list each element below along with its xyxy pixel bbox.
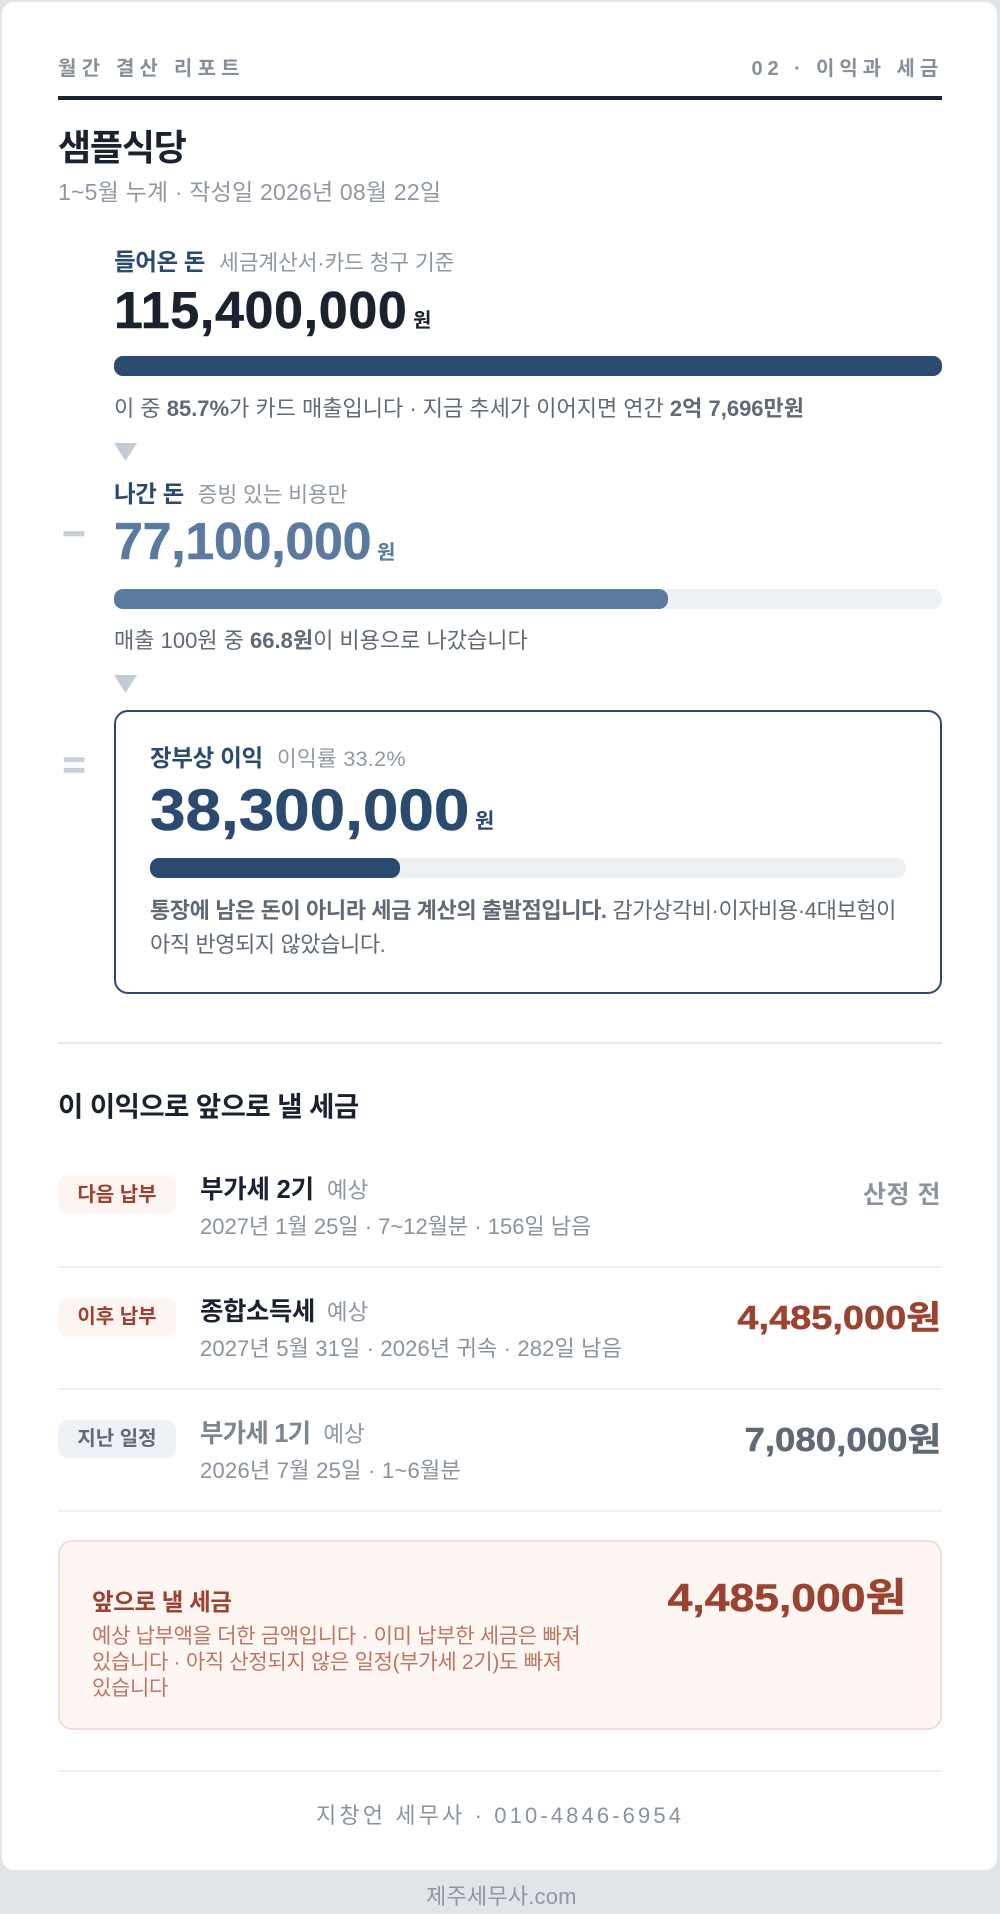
label: book profit: 장부상 이익 이익률 33.2% bbox=[150, 745, 406, 771]
equals sign: = bbox=[62, 743, 86, 787]
unit: money in: 원 bbox=[413, 310, 431, 332]
header rule bbox=[58, 96, 942, 100]
note: book profit: 아직 반영되지 않았습니다. bbox=[150, 932, 385, 957]
site name: 제주세무사.com bbox=[426, 1884, 577, 1909]
bar: money in bbox=[114, 356, 942, 376]
amount: 4,485,000원 bbox=[737, 1299, 941, 1336]
unit: book profit: 원 bbox=[475, 810, 494, 833]
header right label: 02 · 이익과 세금 bbox=[752, 58, 943, 80]
amount status: 산정 전 bbox=[863, 1181, 941, 1209]
badge: later payment bbox=[58, 1298, 176, 1336]
divider bbox=[58, 1510, 942, 1512]
badge: next payment: 다음 납부 bbox=[77, 1184, 157, 1206]
panel: money in bbox=[114, 249, 942, 421]
note: money out: 매출 100원 중 66.8원이 비용으로 나갔습니다 bbox=[114, 628, 528, 653]
row: income tax bbox=[58, 1298, 941, 1361]
note: book profit bbox=[150, 898, 896, 957]
amount: 7,080,000원 bbox=[744, 1421, 941, 1458]
row: VAT 2nd term bbox=[58, 1176, 941, 1239]
label: money in: 들어온 돈 세금계산서·카드 청구 기준 bbox=[114, 249, 454, 275]
divider bbox=[58, 1042, 942, 1044]
unit: money out: 원 bbox=[377, 542, 395, 564]
panel: money out bbox=[114, 481, 942, 653]
bar: money out bbox=[114, 589, 942, 609]
amount: book profit: 38,300,000 bbox=[150, 778, 469, 843]
total description: 예상 납부액을 더한 금액입니다 · 이미 납부한 세금은 빠져 bbox=[92, 1625, 580, 1648]
name: 부가세 1기 예상 bbox=[200, 1420, 365, 1448]
detail: 2026년 7월 25일 · 1~6월분 bbox=[200, 1458, 461, 1483]
minus sign: − bbox=[62, 512, 86, 556]
header left label: 월간 결산 리포트 bbox=[58, 58, 245, 80]
subtitle: 1~5월 누계 · 작성일 2026년 08월 22일 bbox=[58, 179, 441, 205]
total description bbox=[92, 1625, 580, 1700]
name: 부가세 2기 예상 bbox=[200, 1176, 368, 1204]
section heading: 이 이익으로 앞으로 낼 세금 bbox=[58, 1091, 359, 1122]
total label: 앞으로 낼 세금 bbox=[92, 1589, 232, 1615]
row: VAT 1st term bbox=[58, 1420, 941, 1483]
detail: 2027년 5월 31일 · 2026년 귀속 · 282일 남음 bbox=[200, 1336, 622, 1361]
amount: money out: 77,100,000 bbox=[114, 513, 371, 571]
badge: next payment bbox=[58, 1176, 176, 1214]
amount: money in: 115,400,000 bbox=[114, 282, 407, 340]
bar fill: book profit bbox=[150, 858, 400, 878]
total amount: 4,485,000원 bbox=[667, 1577, 906, 1620]
label: money out: 나간 돈 증빙 있는 비용만 bbox=[114, 481, 347, 507]
total description: 있습니다 bbox=[92, 1677, 168, 1700]
badge: past schedule bbox=[58, 1420, 176, 1458]
bar fill: money out bbox=[114, 589, 668, 609]
divider bbox=[58, 1770, 942, 1772]
bar: book profit bbox=[150, 858, 906, 878]
panel: book profit bbox=[114, 710, 942, 994]
note: money in: 이 중 85.7%가 카드 매출입니다 · 지금 추세가 이어지면 연간 2억 7,696만원 bbox=[114, 396, 804, 421]
divider bbox=[58, 1266, 942, 1268]
total description: 있습니다 · 아직 산정되지 않은 일정(부가세 2기)도 빠져 bbox=[92, 1651, 562, 1674]
footer contact: 지창언 세무사 · 010-4846-6954 bbox=[316, 1803, 684, 1828]
name: 종합소득세 예상 bbox=[200, 1298, 368, 1326]
detail: 2027년 1월 25일 · 7~12월분 · 156일 남음 bbox=[200, 1214, 591, 1239]
panel: total future tax bbox=[58, 1540, 942, 1730]
badge: later payment: 이후 납부 bbox=[77, 1306, 157, 1328]
divider bbox=[58, 1388, 942, 1390]
arrow down 1 bbox=[114, 443, 137, 461]
note: book profit: 통장에 남은 돈이 아니라 세금 계산의 출발점입니다. 감가상각비·이자비용·4대보험이 bbox=[150, 898, 896, 923]
badge: past schedule: 지난 일정 bbox=[77, 1428, 157, 1450]
title: 샘플식당 bbox=[58, 127, 186, 168]
arrow down 2 bbox=[114, 675, 137, 693]
